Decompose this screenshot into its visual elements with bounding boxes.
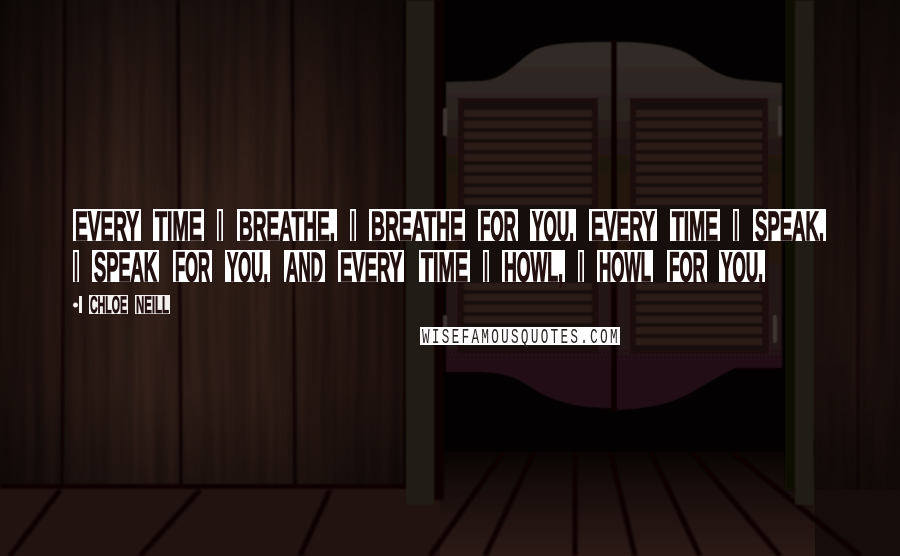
line 2: HOWL bbox=[599, 244, 651, 290]
line 2: HOWL, bbox=[504, 244, 563, 290]
quote text: YOU, bbox=[721, 244, 763, 290]
dark doorway opening bbox=[440, 0, 788, 452]
line 2: FOR bbox=[175, 244, 210, 290]
line 2: I bbox=[74, 244, 78, 290]
attribution: author name: CHLOE bbox=[90, 292, 127, 319]
line 1: TIME bbox=[155, 203, 202, 249]
left louvres bbox=[458, 98, 598, 353]
line 1: TIME bbox=[672, 203, 718, 249]
door frame posts bbox=[406, 0, 814, 505]
door hinges bbox=[443, 106, 782, 343]
line 1: BREATHE, bbox=[239, 203, 335, 249]
left swinging door bbox=[446, 42, 611, 408]
line 2: EVERY bbox=[340, 244, 402, 290]
text: NEILL bbox=[136, 292, 169, 319]
line 2: I bbox=[579, 244, 583, 290]
floor boards bbox=[0, 440, 900, 556]
line 1: EVERY bbox=[591, 203, 655, 249]
line 1: BREATHE bbox=[371, 203, 463, 249]
line 2: SPEAK bbox=[94, 244, 157, 290]
line 1: I bbox=[218, 203, 222, 249]
right swinging door bbox=[617, 42, 782, 410]
line 2: YOU, bbox=[227, 244, 268, 290]
watermark: wisefamousquotes.com: WISEFAMOUSQUOTES.COM bbox=[422, 327, 620, 350]
line 1: EVERY bbox=[75, 203, 139, 249]
line 2 bbox=[73, 244, 765, 290]
center gap bbox=[611, 40, 617, 412]
saloon doors bbox=[443, 40, 782, 412]
line 1: FOR bbox=[480, 203, 516, 249]
line 2: TIME bbox=[421, 244, 468, 290]
line 2: I bbox=[484, 244, 488, 290]
line 1 bbox=[73, 203, 826, 249]
quote text bbox=[73, 203, 826, 290]
line 1: YOU, bbox=[532, 203, 574, 249]
line 1: I bbox=[734, 203, 738, 249]
line 2: AND bbox=[286, 244, 323, 290]
line 2: FOR bbox=[669, 244, 705, 290]
right louvres bbox=[630, 98, 768, 353]
line 1: I bbox=[351, 203, 355, 249]
